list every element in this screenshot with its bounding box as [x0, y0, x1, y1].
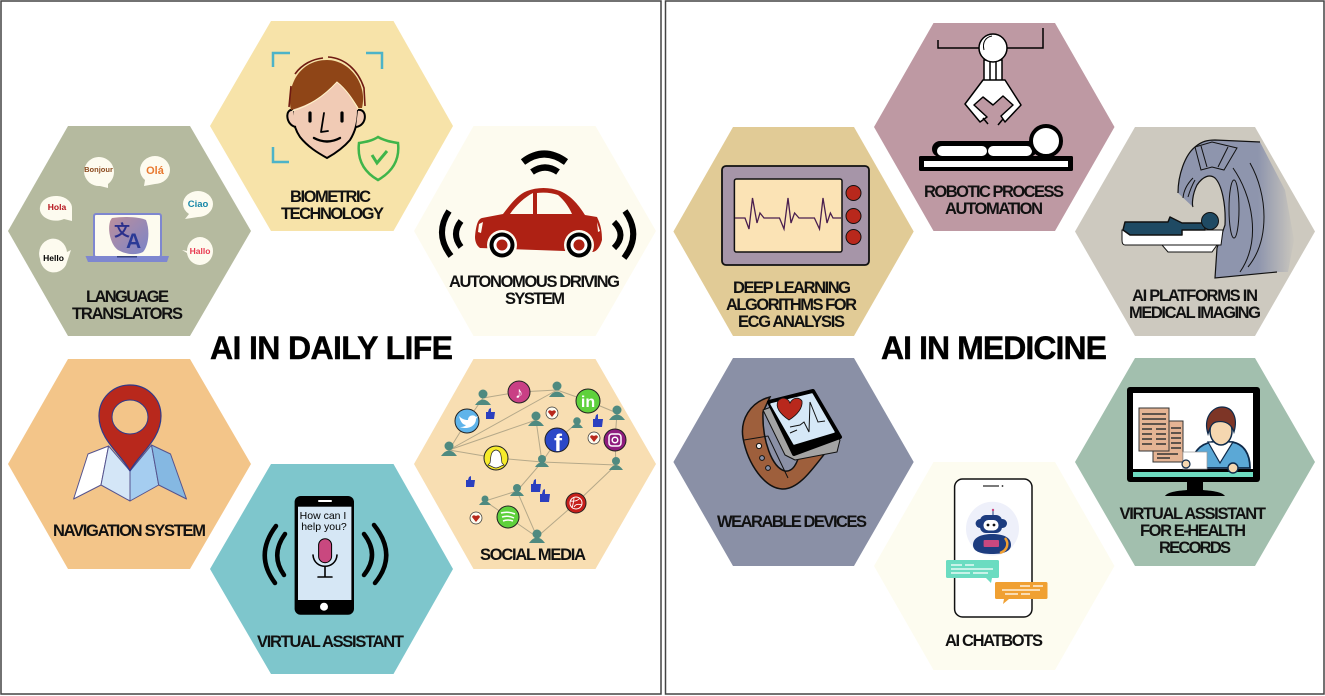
- label: deep learning algorithms for ECG analysis: ALGORITHMS FOR: [726, 296, 857, 314]
- label: virtual assistant for e-health records: FOR E-HEALTH: [1140, 522, 1246, 540]
- hexagon: virtual assistant for e-health records: [1075, 358, 1315, 566]
- label: autonomous driving system: AUTONOMOUS DRIVING: [449, 273, 620, 291]
- icon: translator laptop with speech bubbles: [39, 156, 213, 272]
- label: AI platforms in medical imaging: MEDICAL IMAGING: [1129, 304, 1261, 322]
- label: robotic process automation: AUTOMATION: [945, 200, 1043, 218]
- label: language translators: TRANSLATORS: [72, 305, 183, 323]
- label: AI platforms in medical imaging: AI PLATFORMS IN: [1132, 287, 1258, 305]
- icon: translator laptop with speech bubbles: 文: [114, 221, 130, 240]
- label: language translators: [72, 288, 183, 323]
- title: AI in medicine: AI IN MEDICINE: [881, 330, 1107, 366]
- icon: map with location pin: [74, 385, 186, 501]
- icon: translator laptop with speech bubbles: Hello: [43, 253, 64, 263]
- hexagon: language translators: [8, 126, 251, 336]
- icon: translator laptop with speech bubbles: Hola: [48, 202, 66, 212]
- icon: translator laptop with speech bubbles: Bonjour: [84, 165, 113, 174]
- icon: connected car: [442, 154, 633, 260]
- label: language translators: LANGUAGE: [86, 288, 169, 306]
- label: biometric technology: [281, 188, 384, 223]
- icon: surgical robot over patient: [919, 28, 1073, 171]
- label: virtual assistant for e-health records: [1120, 505, 1266, 557]
- icon: CT scanner: [1122, 140, 1294, 278]
- label: AI chatbots: AI CHATBOTS: [945, 632, 1043, 650]
- hexagon: navigation system: [8, 359, 251, 569]
- label: biometric technology: TECHNOLOGY: [281, 205, 384, 223]
- label: deep learning algorithms for ECG analysis: ECG ANALYSIS: [738, 313, 845, 331]
- label: virtual assistant for e-health records: RECORDS: [1159, 539, 1231, 557]
- icon: social network graph: ♪: [515, 385, 523, 402]
- icon: translator laptop with speech bubbles: Olá: [146, 165, 165, 177]
- hexagon: biometric technology: [210, 21, 453, 231]
- hexagon: AI chatbots: [874, 462, 1114, 670]
- icon: social network graph: [441, 381, 626, 543]
- icon: translator laptop with speech bubbles: Ciao: [188, 199, 208, 210]
- label: deep learning algorithms for ECG analysis: DEEP LEARNING: [733, 279, 851, 297]
- icon: social network graph: f: [554, 430, 563, 457]
- panel: AI in medicine: [666, 1, 1324, 694]
- label: AI platforms in medical imaging: [1129, 287, 1261, 322]
- label: virtual assistant: VIRTUAL ASSISTANT: [257, 633, 404, 651]
- hexagon: social media: [414, 359, 656, 569]
- hexagon: virtual assistant: [210, 464, 453, 674]
- icon: smartphone voice assistant: How can I: [300, 510, 346, 522]
- label: social media: SOCIAL MEDIA: [480, 546, 586, 564]
- icon: smartwatch: [742, 391, 840, 489]
- icon: doctor on monitor with records: [1127, 387, 1260, 496]
- hexagon: wearable devices: [673, 358, 914, 566]
- label: deep learning algorithms for ECG analysis: [726, 279, 857, 331]
- label: wearable devices: WEARABLE DEVICES: [717, 513, 867, 531]
- hexagon: deep learning ECG analysis: [673, 127, 914, 336]
- icon: smartphone voice assistant: help you?: [301, 521, 347, 533]
- hexagon: AI platforms in medical imaging: [1075, 127, 1315, 336]
- label: autonomous driving system: SYSTEM: [505, 290, 565, 308]
- icon: smartphone voice assistant: [265, 496, 386, 615]
- label: biometric technology: BIOMETRIC: [290, 188, 371, 206]
- icon: translator laptop with speech bubbles: Hallo: [190, 246, 210, 256]
- panel: AI in daily life: [1, 1, 661, 694]
- label: navigation system: NAVIGATION SYSTEM: [53, 522, 206, 540]
- icon: ECG monitor: [722, 166, 869, 265]
- label: autonomous driving system: [449, 273, 620, 308]
- label: virtual assistant for e-health records: VIRTUAL ASSISTANT: [1120, 505, 1266, 523]
- label: robotic process automation: ROBOTIC PROCESS: [924, 183, 1064, 201]
- label: robotic process automation: [924, 183, 1064, 218]
- title: AI in daily life: AI IN DAILY LIFE: [210, 330, 453, 366]
- icon: chatbot on phone: [946, 479, 1048, 617]
- icon: social network graph: in: [581, 394, 595, 411]
- hexagon: robotic process automation: [874, 23, 1114, 231]
- hexagon: autonomous driving system: [414, 126, 656, 336]
- icon: translator laptop with speech bubbles: A: [126, 230, 141, 253]
- icon: face scan: [273, 53, 398, 180]
